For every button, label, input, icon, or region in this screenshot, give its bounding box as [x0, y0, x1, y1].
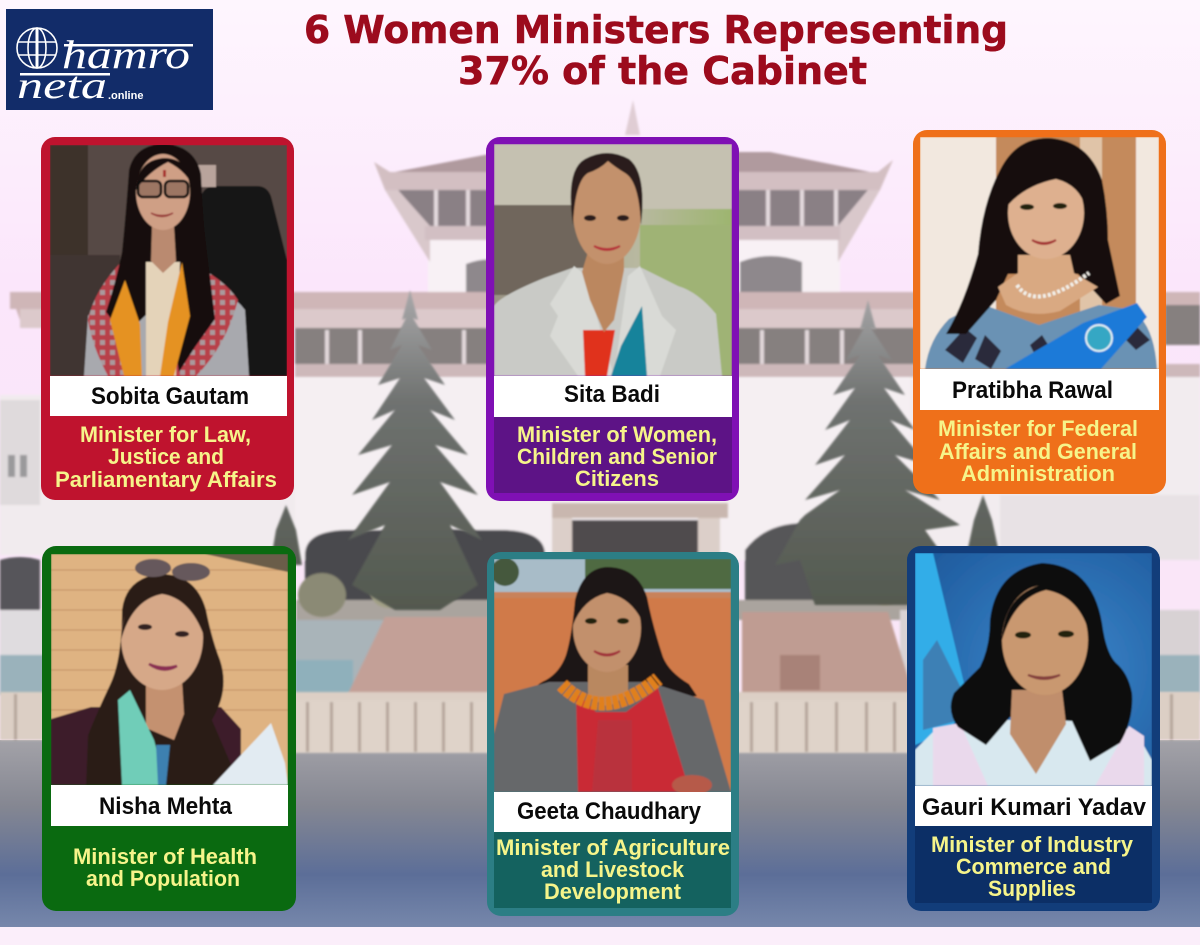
role: Justice and [108, 444, 224, 469]
role: Administration [961, 461, 1115, 486]
name plate [920, 369, 1159, 410]
portrait: Sita Badi [494, 144, 732, 376]
name plate: Pratibha Rawal [952, 377, 1113, 404]
logo: hamro neta [6, 9, 213, 110]
name plate [50, 376, 287, 416]
role [517, 422, 717, 491]
role: Affairs and General [939, 439, 1137, 464]
role [55, 422, 277, 492]
role [938, 416, 1138, 486]
role: Minister for Federal [938, 416, 1138, 441]
portrait: Geeta Chaudhary [491, 558, 731, 795]
panel: Nisha Mehta [42, 546, 296, 911]
background: pine trees [270, 290, 998, 610]
logo: hamro neta: neta [17, 65, 107, 107]
portrait: Gauri Kumari Yadav [915, 553, 1152, 786]
panel: Sobita Gautam [41, 137, 294, 500]
role: Citizens [575, 466, 659, 491]
name plate: Gauri Kumari Yadav [922, 794, 1147, 821]
name plate [51, 785, 288, 826]
role [73, 844, 257, 891]
role: Commerce and [956, 854, 1111, 879]
role: Minister for Law, [80, 422, 251, 447]
portrait: Pratibha Rawal [920, 137, 1159, 369]
name plate: Sobita Gautam [91, 383, 249, 410]
name plate: Geeta Chaudhary [517, 798, 702, 825]
role: Minister of Industry [931, 832, 1133, 857]
logo: hamro neta: .online [108, 90, 143, 102]
name plate [494, 376, 732, 417]
role: Children and Senior [517, 444, 717, 469]
panel: Geeta Chaudhary [487, 552, 739, 916]
name plate: Nisha Mehta [99, 793, 233, 820]
panel: Pratibha Rawal [913, 130, 1166, 494]
background: balustrade [0, 692, 1200, 753]
role [496, 835, 730, 904]
role: Development [544, 879, 681, 904]
role: Minister of Women, [517, 422, 717, 447]
background: forecourt ground [0, 740, 1200, 927]
title [304, 8, 1008, 93]
name plate [915, 786, 1152, 826]
portrait: Nisha Mehta [51, 554, 288, 785]
role: Minister of Agriculture [496, 835, 730, 860]
panel: Gauri Kumari Yadav [907, 546, 1160, 911]
role: Minister of Health [73, 844, 257, 869]
role: and Population [86, 866, 240, 891]
title: 6 Women Ministers Representing [304, 8, 1008, 52]
title: 37% of the Cabinet [458, 49, 867, 93]
role: and Livestock [541, 857, 684, 882]
background: parliament building [0, 100, 1200, 700]
name plate: Sita Badi [564, 381, 660, 408]
role: Supplies [988, 876, 1076, 901]
role [931, 832, 1133, 901]
logo: hamro neta: hamro [62, 32, 190, 77]
logo globe icon [17, 28, 57, 68]
role: Parliamentary Affairs [55, 467, 277, 492]
panel: Sita Badi [486, 137, 739, 501]
name plate [494, 792, 731, 832]
portrait: Sobita Gautam [50, 144, 287, 376]
